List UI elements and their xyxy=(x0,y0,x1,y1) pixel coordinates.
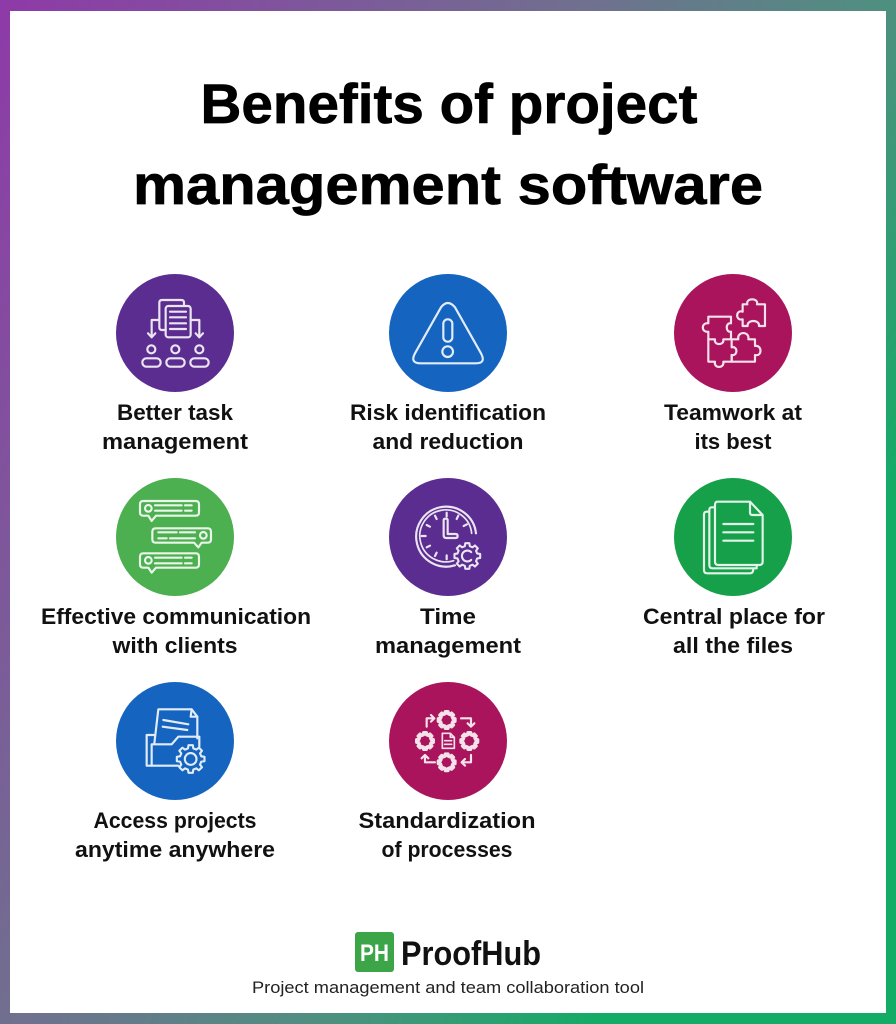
label xyxy=(75,808,275,862)
footer: ProofHub brand xyxy=(252,932,644,997)
label: Time xyxy=(420,604,476,629)
icon: chat bubbles xyxy=(116,478,234,596)
benefit: central place for all the files xyxy=(643,478,825,658)
title: management software xyxy=(133,153,763,216)
label: Standardization xyxy=(358,808,536,833)
icon: clock with gear xyxy=(389,478,507,596)
label xyxy=(102,400,249,454)
label xyxy=(350,400,546,454)
label: all the files xyxy=(673,633,793,658)
label: management xyxy=(375,633,522,658)
label: anytime anywhere xyxy=(75,837,275,862)
benefit: time management xyxy=(375,478,522,658)
benefit: risk identification and reduction xyxy=(350,274,546,454)
label: Effective communication xyxy=(41,604,311,629)
icon: folder with gear xyxy=(116,682,234,800)
label xyxy=(358,808,536,862)
benefit: better task management xyxy=(102,274,249,454)
title: Benefits of project xyxy=(200,72,698,135)
icon: documents assigned to team xyxy=(116,274,234,392)
wordmark: ProofHub xyxy=(401,935,541,973)
label: of processes xyxy=(382,837,512,862)
label xyxy=(643,604,825,658)
benefit: teamwork at its best xyxy=(664,274,803,454)
icon: ProofHub logo mark xyxy=(355,932,394,972)
label: and reduction xyxy=(372,429,524,454)
benefit: effective communication with clients xyxy=(41,478,311,658)
icon: warning triangle xyxy=(389,274,507,392)
icon: process gears cycle xyxy=(389,682,507,800)
icon: stacked documents xyxy=(674,478,792,596)
label: Central place for xyxy=(643,604,825,629)
label: Risk identification xyxy=(350,400,546,425)
label: with clients xyxy=(111,633,238,658)
label: Access projects xyxy=(94,808,256,833)
benefit: access projects anytime anywhere xyxy=(75,682,275,862)
icon: puzzle pieces xyxy=(674,274,792,392)
title xyxy=(133,72,763,216)
label xyxy=(41,604,311,658)
label: Better task xyxy=(117,400,234,425)
label xyxy=(664,400,803,454)
label: management xyxy=(102,429,249,454)
icon: ProofHub logo mark: PH xyxy=(360,940,389,967)
tagline: Project management and team collaboration tool xyxy=(252,978,644,997)
benefit: standardization of processes xyxy=(358,682,536,862)
label: Teamwork at xyxy=(664,400,803,425)
label xyxy=(375,604,522,658)
label: its best xyxy=(694,429,772,454)
